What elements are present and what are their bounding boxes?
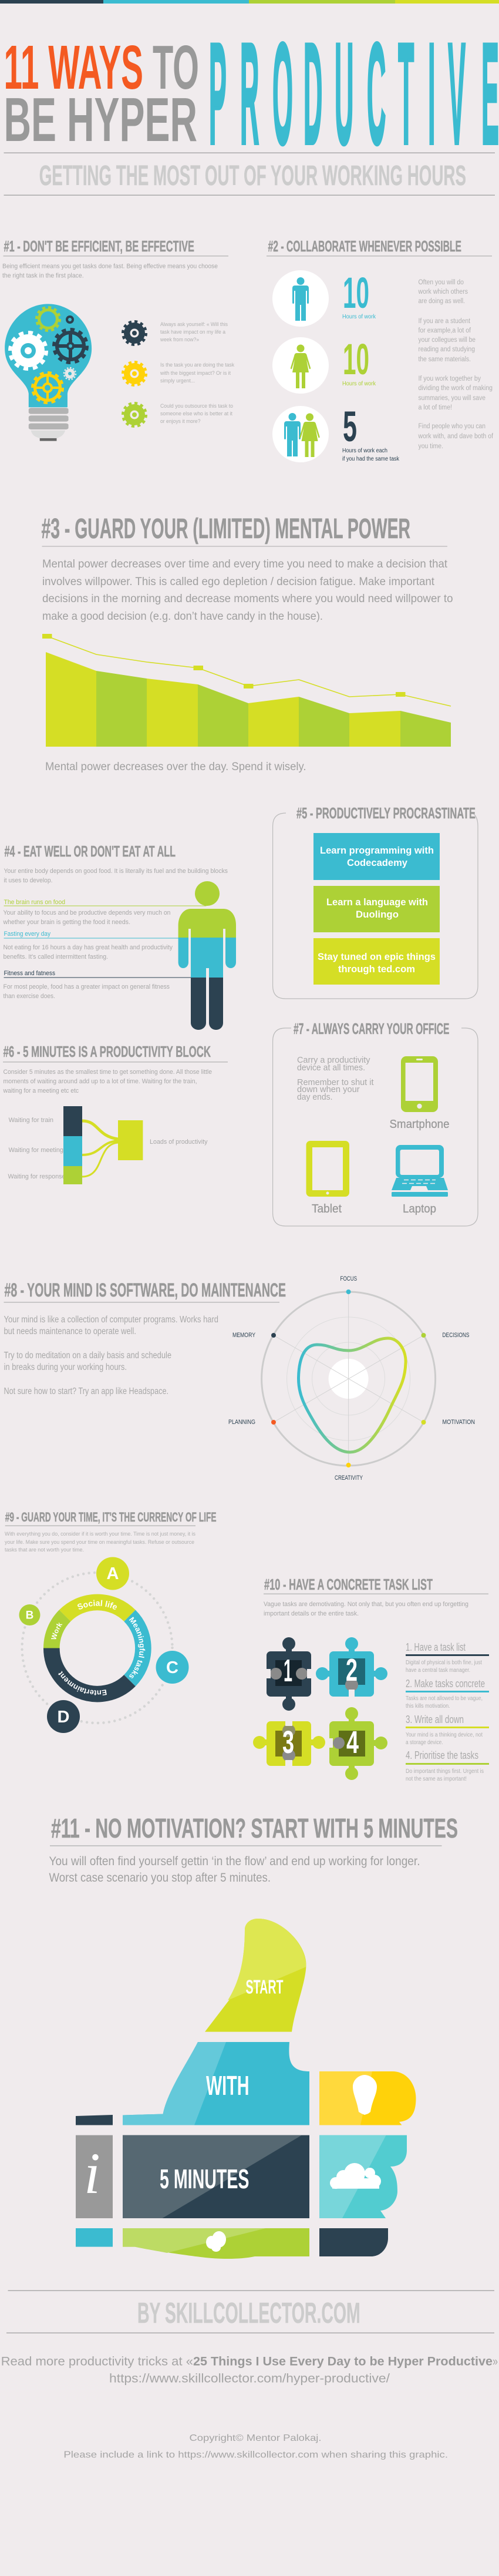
read more text: https://www.skillcollector.com/hyper-productive/ — [109, 2372, 390, 2386]
card: codecademy: Learn programming with — [320, 845, 434, 856]
panel: #1 don't be efficient — [2, 237, 234, 441]
stat: 10 hours green: Hours of work — [342, 381, 376, 387]
radar chart — [228, 1275, 475, 1482]
tip 2: biggest impact: simply urgent... — [160, 378, 195, 384]
title: 11 WAYS — [4, 33, 143, 102]
intro text #4: it uses to develop. — [4, 877, 53, 884]
body text #2: If you work together by — [418, 375, 481, 382]
radar chart: DECISIONS — [443, 1332, 470, 1339]
tip 3: outsource: or enjoys it more? — [160, 418, 201, 425]
body text #7: device at all times. — [297, 1063, 365, 1073]
body text #10 — [264, 1601, 468, 1617]
stat: 10 hours — [342, 268, 376, 320]
body text #2: Often you will do — [418, 279, 464, 286]
icon: woman in circle — [272, 337, 329, 394]
intro text #4: Your entire body depends on good food. It is literally its fuel and the building blocks — [4, 868, 228, 875]
body text #11 — [49, 1855, 420, 1885]
body text #2: a lot of time! — [418, 404, 452, 411]
panel: #7 always carry your office — [273, 1020, 478, 1226]
body text #2: work which others — [418, 288, 468, 295]
body text #7: Remember to shut it — [297, 1078, 373, 1087]
heading #6: #6 - 5 MINUTES IS A PRODUCTIVITY BLOCK — [4, 1043, 211, 1060]
icon: body figure — [178, 881, 236, 1030]
body text #10: important details or the entire task. — [264, 1610, 359, 1617]
tip 3: outsource — [123, 403, 233, 426]
stat: 5 hours: if you had the same task — [342, 456, 400, 462]
badge A — [96, 1557, 129, 1590]
body text #8: in breaks during your working hours. — [4, 1362, 127, 1372]
step 3: Your mind is a thinking device, not — [406, 1732, 483, 1738]
flow labels — [8, 1117, 208, 1180]
body text #11: Worst case scenario you stop after 5 minutes. — [49, 1871, 271, 1885]
heading #8: #8 - YOUR MIND IS SOFTWARE, DO MAINTENANCE — [5, 1279, 286, 1301]
tip 1: impact question: Always ask yourself: « Will this — [160, 321, 228, 328]
item: fasting every day — [4, 931, 178, 960]
body text #8: but needs maintenance to operate well. — [4, 1326, 136, 1336]
cuff block top — [76, 2115, 113, 2125]
puzzle piece 1: 1 — [284, 1653, 292, 1688]
flow labels: Loads of productivity — [150, 1138, 208, 1146]
item: fitness and fatness: than exercise does. — [4, 993, 55, 1000]
puzzle piece 4 — [329, 1707, 387, 1780]
body text #2: Find people who you can — [418, 423, 485, 430]
body text #2 — [418, 279, 494, 450]
item: fitness and fatness: Fitness and fatness — [4, 970, 55, 977]
step 2: Tasks are not allowed to be vague, — [406, 1695, 483, 1702]
body text #2: the same materials. — [418, 356, 471, 363]
cuff block bottom — [76, 2228, 113, 2247]
card: codecademy: Codecademy — [347, 857, 408, 868]
puzzle piece 1 — [267, 1637, 311, 1711]
step 4 — [406, 1749, 489, 1782]
donut chart: time allocation: Entertainment — [58, 1671, 107, 1695]
body text #11: You will often find yourself gettin ‘in the flow’ and end up working for longer. — [49, 1855, 420, 1868]
thumb block: start — [205, 1919, 306, 2032]
copyright: Please include a link to https://www.skillcollector.com when sharing this graphic. — [63, 2450, 448, 2460]
flow labels: Waiting for train — [9, 1117, 53, 1124]
radar chart: MEMORY — [232, 1332, 256, 1339]
badge B — [19, 1604, 40, 1625]
puzzle piece 2: 2 — [346, 1653, 358, 1688]
read more text: 25 Things I Use Every Day to be Hyper Productive — [193, 2355, 493, 2369]
intro text #1: the right task in the first place. — [2, 273, 84, 280]
badge D: D — [58, 1708, 69, 1727]
panel: #3 guard mental power — [41, 513, 453, 773]
step 1: Digital of physical is both fine, just — [406, 1660, 482, 1666]
body text #2: work with, and dave both of — [418, 433, 494, 440]
body text #2: your collegues will be — [418, 337, 476, 344]
puzzle piece 2 — [316, 1637, 387, 1697]
icon: light bulb with gears — [5, 304, 92, 441]
stat: 5 hours — [342, 403, 400, 462]
tip 2: biggest impact: with the biggest impact? Or is it — [160, 370, 231, 377]
step 3: a storage device. — [406, 1739, 443, 1746]
item: the brain runs on food: Your ability to focus and be productive depends very much on — [4, 909, 170, 916]
body text #8: Not sure how to start? Try an app like Headspace. — [4, 1386, 168, 1396]
heading #1: #1 - DON'T BE EFFICIENT, BE EFFECTIVE — [4, 237, 194, 255]
step 2: this kills motivation. — [406, 1703, 450, 1710]
stat: 10 hours green — [342, 335, 376, 387]
title — [4, 14, 499, 174]
body text #8: Try to do meditation on a daily basis and schedule — [4, 1351, 171, 1361]
step 3 — [406, 1714, 489, 1746]
body text #7: Carry a productivity — [297, 1056, 370, 1065]
body text #3 — [42, 558, 453, 623]
donut chart: time allocation — [43, 1594, 151, 1702]
card: duolingo: Duolingo — [356, 909, 399, 920]
body text #8 — [4, 1315, 218, 1396]
badge C — [156, 1651, 189, 1684]
thumb block: start: START — [245, 1976, 283, 1998]
chart caption: Mental power decreases over the day. Spend it wisely. — [45, 761, 306, 773]
icon: man in circle — [272, 270, 329, 327]
intro text #1 — [2, 263, 218, 280]
body text #9: With everything you do, consider if it is worth your time. Time is not just money, it is — [5, 1531, 195, 1537]
icon: smartphone — [390, 1056, 450, 1131]
finger block: dark — [319, 2228, 388, 2256]
stat: 5 hours: Hours of work each — [342, 448, 387, 454]
tip 1: impact question: task have impact on my life a — [160, 329, 226, 335]
tip 3: outsource: Could you outsource this task to — [160, 403, 233, 409]
footer — [1, 2290, 498, 2460]
body text #2: If you are a student — [418, 318, 471, 325]
body text #6: waiting for a meeting etc etc — [3, 1087, 79, 1094]
item: fitness and fatness — [4, 970, 191, 1000]
step 1 — [406, 1641, 489, 1674]
read more text: Read more productivity tricks at « — [1, 2355, 193, 2369]
puzzle piece 3 — [253, 1721, 325, 1766]
radar chart: FOCUS — [340, 1275, 357, 1282]
panel: #8 your mind is software — [4, 1275, 475, 1482]
donut chart: time allocation: Social life — [77, 1600, 117, 1610]
step 3: 3. Write all down — [406, 1714, 464, 1725]
step 1: have a central task manager. — [406, 1667, 470, 1674]
hand block: with: WITH — [206, 2070, 249, 2101]
body text #3: decisions in the morning and decrease moments where you would need willpower to — [42, 593, 453, 605]
panel: #2 collaborate — [267, 237, 494, 462]
step 2 — [406, 1678, 489, 1710]
area chart: mental power over the day — [42, 634, 451, 747]
item: the brain runs on food — [3, 899, 207, 926]
stat: 5 hours: 5 — [343, 403, 357, 451]
donut chart: time allocation: Meaningful tasks — [129, 1617, 146, 1678]
body text #9: tasks that are not worth your time. — [5, 1547, 84, 1553]
hand block: with — [123, 2042, 309, 2125]
body text #3: involves willpower. This is called ego depletion / decision fatigue. Make important — [42, 576, 435, 588]
card: duolingo: Learn a language with — [326, 896, 428, 908]
item: the brain runs on food: The brain runs on food — [4, 899, 65, 906]
panel: #6 five minutes — [3, 1043, 228, 1184]
stat: 10 hours: Hours of work — [342, 314, 376, 320]
icon: laptop — [392, 1145, 448, 1215]
puzzle piece 3: 3 — [282, 1725, 294, 1760]
icon: tablet: Tablet — [312, 1203, 342, 1215]
item: the brain runs on food: whether your brain is getting the food it needs. — [3, 919, 130, 926]
heading #4: #4 - EAT WELL OR DON'T EAT AT ALL — [5, 842, 176, 860]
radar chart: MOTIVATION — [443, 1419, 475, 1426]
hand block: 5 minutes: 5 MINUTES — [160, 2164, 249, 2194]
badge B: B — [26, 1610, 33, 1621]
copyright: Copyright© Mentor Palokaj. — [189, 2433, 322, 2443]
copyright — [63, 2433, 448, 2460]
stat: 10 hours: 10 — [343, 268, 369, 317]
title: PRODUCTIVE — [209, 14, 499, 174]
heading #9: #9 - GUARD YOUR TIME, IT'S THE CURRENCY OF LIFE — [5, 1510, 217, 1524]
title: BE HYPER — [4, 85, 197, 155]
panel: #10 concrete task list — [253, 1576, 489, 1782]
panel: #9 guard your time — [5, 1510, 217, 1733]
panel: #11 no motivation — [49, 1813, 458, 2259]
panel: #4 eat well — [3, 842, 236, 1030]
dotted orbit — [22, 1573, 173, 1723]
body text #2: reading and studying — [418, 346, 475, 353]
hand block: speech bubbles — [123, 2228, 309, 2259]
step 4: not the same as important! — [406, 1776, 467, 1782]
body text #9: your life. Make sure you spend your time on meaningful tasks. Refuse or outsource — [5, 1539, 194, 1546]
card: codecademy — [313, 833, 440, 880]
intro text #4 — [4, 868, 228, 884]
info block: i — [84, 2141, 100, 2206]
flow labels: Waiting for meeting — [9, 1147, 63, 1154]
body text #2: dividing the work of making — [418, 385, 493, 392]
panel: #5 productively procrastinate — [273, 804, 478, 999]
badge C: C — [166, 1658, 178, 1677]
item: fasting every day: Fasting every day — [4, 931, 50, 938]
body text #10: Vague tasks are demotivating. Not only that, but you often end up forgetting — [264, 1601, 468, 1608]
icon: smartphone: Smartphone — [390, 1118, 450, 1131]
tip 1: impact question — [123, 321, 228, 344]
donut chart: time allocation: Work — [50, 1623, 62, 1639]
hand block: 5 minutes — [123, 2135, 309, 2218]
sankey chart — [63, 1106, 143, 1184]
body text #6: moments of waiting around add up to a lot of time. Waiting for the train, — [4, 1078, 197, 1085]
body text #2: summaries, you will save — [418, 395, 485, 402]
item: fasting every day: Not eating for 16 hours a day has great health and productivity — [4, 944, 173, 951]
card: ted.com: through ted.com — [338, 963, 415, 975]
tip 2: biggest impact: Is the task you are doing the task — [160, 362, 234, 368]
tip 1: impact question: week from now?» — [160, 337, 199, 343]
icon: laptop: Laptop — [403, 1203, 436, 1215]
card: duolingo — [313, 886, 440, 932]
body text #9 — [5, 1531, 195, 1553]
tip 3: outsource: someone else who is better at it — [160, 411, 232, 417]
icon: tablet — [306, 1141, 349, 1215]
body text #6 — [3, 1069, 212, 1094]
body text #2: for example,a lot of — [418, 327, 471, 334]
body text #7 — [297, 1056, 373, 1102]
body text #8: Your mind is like a collection of computer programs. Works hard — [4, 1315, 218, 1325]
top colour bar — [0, 0, 499, 4]
item: fasting every day: benefits. It's called intermittent fasting. — [4, 953, 108, 960]
step 4: Do important things first. Urgent is — [406, 1768, 484, 1775]
body text #7: down when your — [297, 1085, 360, 1094]
read more text — [1, 2355, 498, 2386]
info block — [76, 2135, 113, 2218]
step 1: 1. Have a task list — [406, 1641, 466, 1653]
intro text #1: Being efficient means you get tasks done fast. Being effective means you choose — [2, 263, 218, 270]
item: fitness and fatness: For most people, food has a greater impact on general fitness — [4, 983, 170, 990]
body text #2: are doing as well. — [418, 298, 465, 305]
radar chart: PLANNING — [228, 1419, 255, 1426]
title: TO — [153, 33, 199, 102]
stat: 10 hours green: 10 — [343, 335, 369, 384]
body text #7: day ends. — [297, 1093, 332, 1102]
body text #6: Consider 5 minutes as the smallest time to get something done. All those little — [4, 1069, 212, 1076]
badge D — [47, 1700, 80, 1733]
finger block: cloud — [319, 2135, 407, 2218]
body text #2: you time. — [418, 443, 443, 450]
flow labels: Waiting for response — [8, 1173, 66, 1180]
puzzle piece 4: 4 — [346, 1725, 359, 1760]
body text #3: Mental power decreases over time and every time you need to make a decision that — [42, 558, 448, 570]
badge A: A — [107, 1564, 119, 1583]
body text #3: make a good decision (e.g. don’t have candy in the house). — [42, 610, 323, 623]
icon: couple in circle — [272, 406, 329, 462]
radar chart: CREATIVITY — [335, 1475, 363, 1482]
tip 2: biggest impact — [123, 362, 234, 385]
finger block: light bulb — [319, 2071, 416, 2125]
thumbs-up illustration — [76, 1919, 416, 2259]
card: ted.com: Stay tuned on epic things — [318, 951, 436, 962]
card: ted.com — [313, 938, 440, 985]
